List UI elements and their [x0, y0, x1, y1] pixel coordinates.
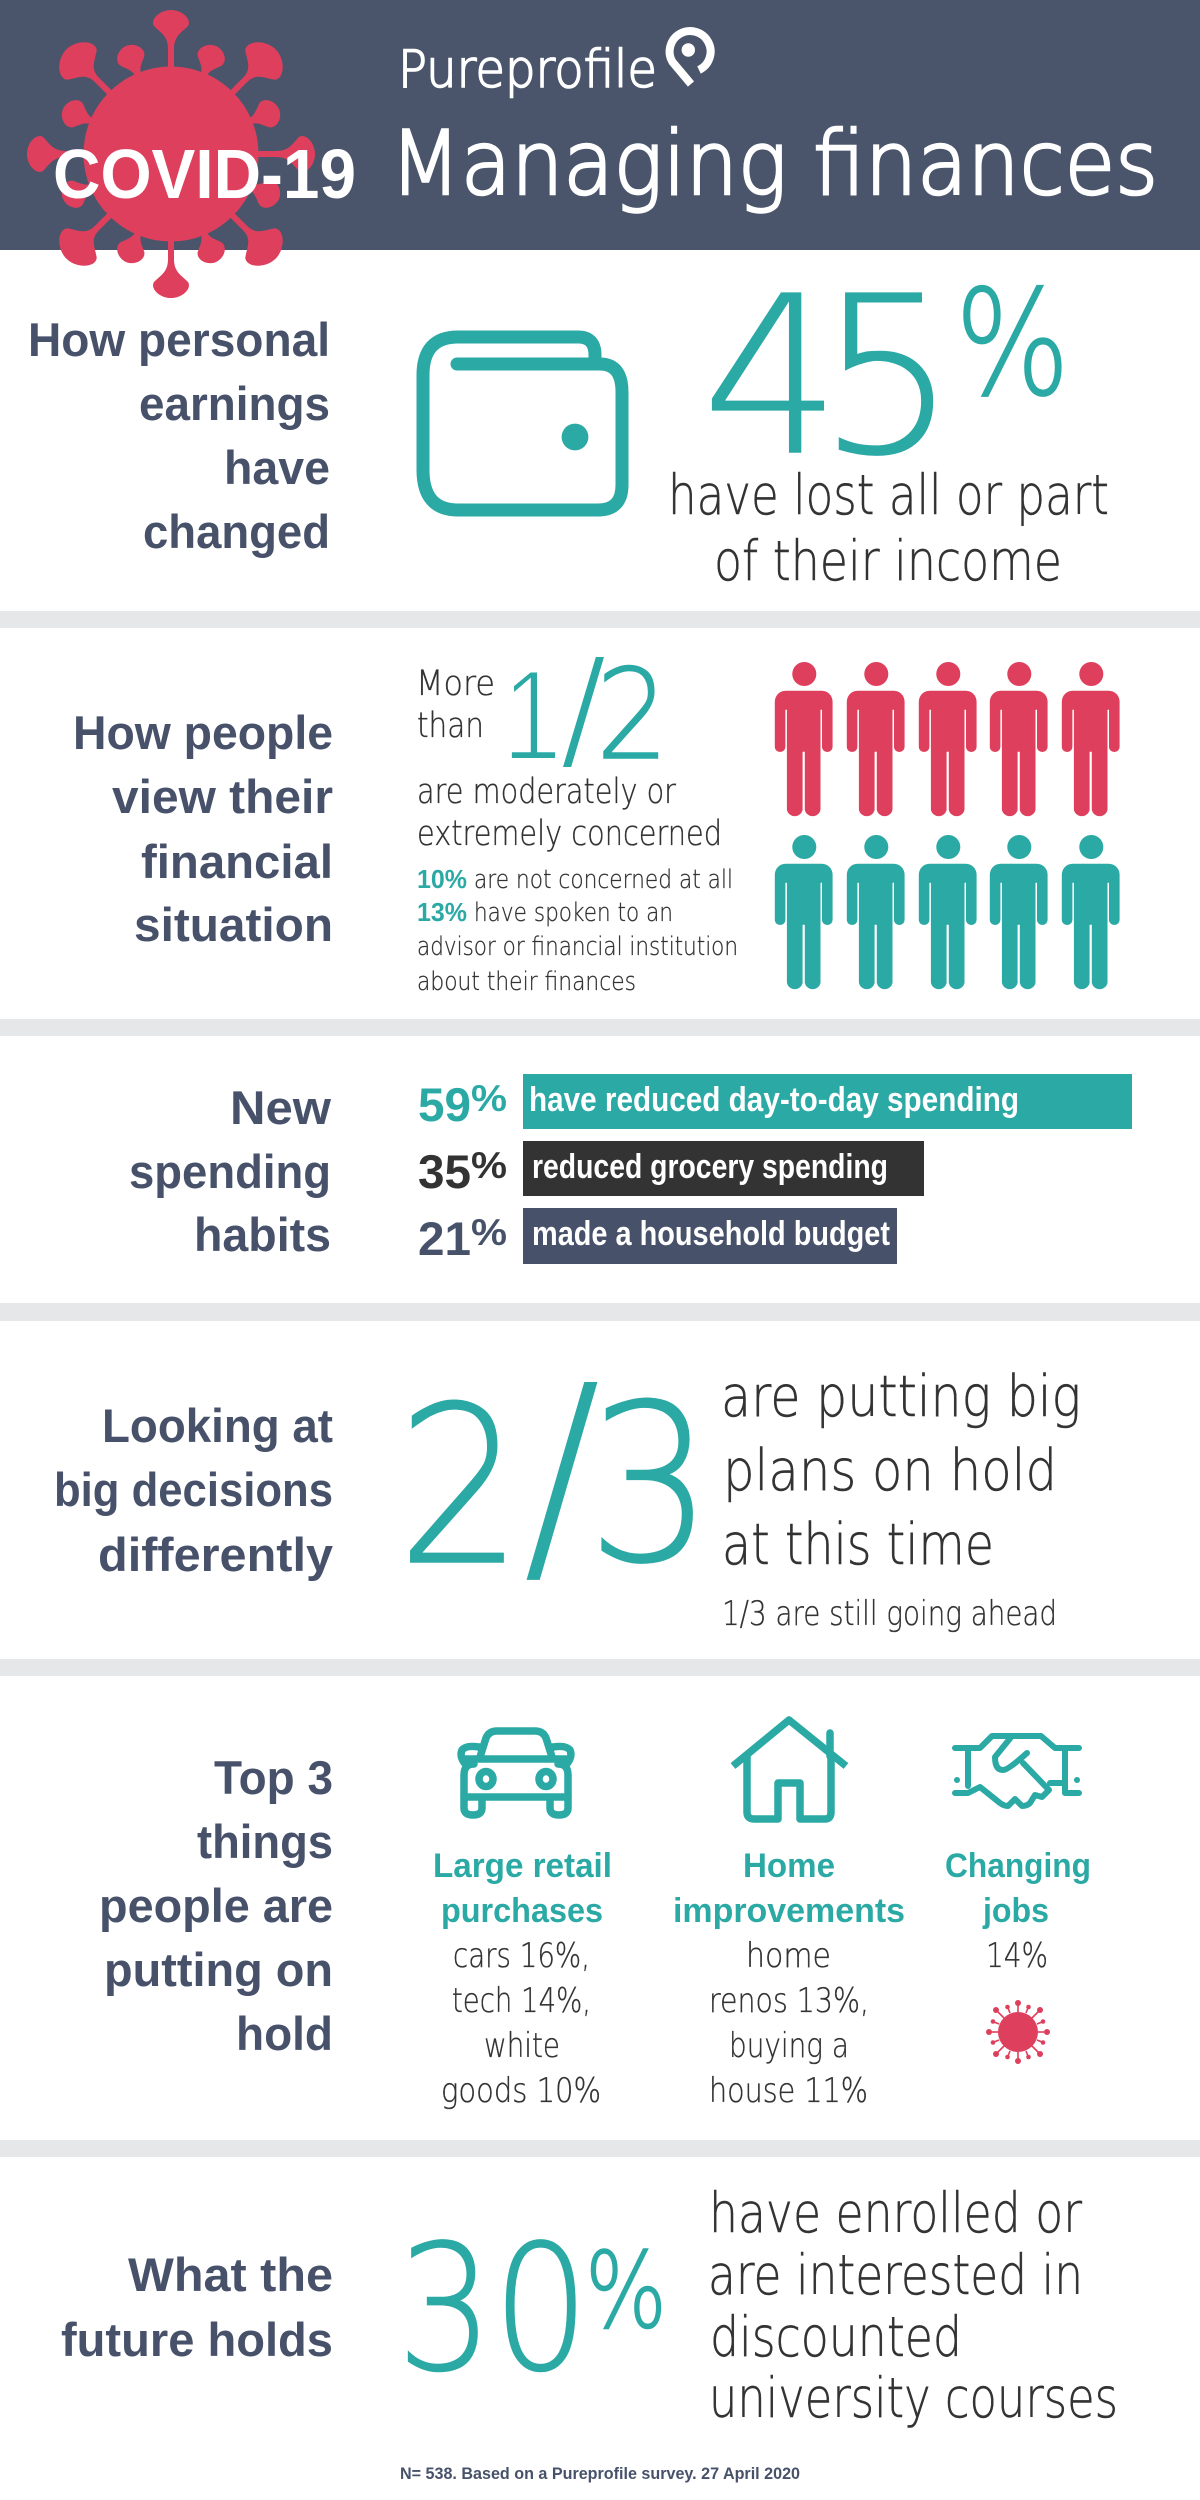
- bar: 59% reduced day-to-day spending: [418, 1074, 1132, 1131]
- heading: how people view their financial situation: situation: [134, 898, 333, 951]
- text: have enrolled or are interested in discounted university courses: have enrolled or: [709, 2181, 1082, 2245]
- column: home improvements: improvements: [673, 1892, 905, 1930]
- panel: top 3 things on hold: [99, 1720, 1091, 2111]
- column: large retail purchases: [433, 1847, 612, 2111]
- text: secondary stats: have spoken to an: [474, 898, 673, 928]
- stat: more than 1/2: [416, 632, 669, 788]
- title: Managing finances: Managing finances: [390, 112, 1158, 215]
- text: have lost all or part of their income: [668, 463, 1109, 593]
- text: 1/3 are still going ahead: 1/3 are still going ahead: [722, 1594, 1057, 1634]
- stat: 45%: [702, 251, 1070, 504]
- heading: how personal earnings have changed: [28, 313, 330, 558]
- column: large retail purchases: tech 14%,: [452, 1981, 591, 2021]
- text: have enrolled or are interested in discounted university courses: [708, 2181, 1118, 2430]
- text: secondary stats: 10%: [417, 864, 467, 894]
- column: changing jobs: Changing: [945, 1847, 1091, 1885]
- panel: big decisions: [54, 1336, 1081, 1634]
- stat: more than 1/2: 2: [596, 643, 669, 788]
- icon: location pin: [670, 31, 711, 84]
- bar: 21% made a household budget: [418, 1208, 897, 1265]
- text: have enrolled or are interested in discounted university courses: university courses: [709, 2366, 1118, 2430]
- heading: how people view their financial situation: financial: [141, 835, 333, 888]
- text: are moderately or extremely concerned: extremely concerned: [417, 814, 722, 854]
- stat: more than 1/2: 1: [502, 642, 562, 788]
- bar: 35% reduced grocery spending: [418, 1141, 924, 1198]
- icon: coronavirus: [27, 10, 315, 298]
- text: are moderately or extremely concerned: are moderately or: [417, 772, 676, 812]
- heading: top 3 things people are putting on hold: putting on: [104, 1943, 333, 1996]
- heading: how people view their financial situation: How people: [73, 706, 333, 759]
- text: are putting big plans on hold at this time: [721, 1364, 1081, 1578]
- bar: 59% reduced day-to-day spending: %: [471, 1078, 507, 1119]
- heading: what the future holds: What the: [128, 2248, 333, 2301]
- stat: 2/3: 3: [587, 1359, 713, 1612]
- bar: 35% reduced grocery spending: reduced grocery spending: [532, 1148, 888, 1186]
- heading: how personal earnings have changed: have: [224, 441, 330, 494]
- stat: more than 1/2: More: [416, 664, 495, 704]
- heading: how personal earnings have changed: changed: [143, 505, 330, 558]
- bar: 21% made a household budget: 21: [418, 1212, 471, 1265]
- icon: house: [733, 1720, 846, 1819]
- column: home improvements: [673, 1847, 905, 2111]
- heading: how personal earnings have changed: How personal: [28, 313, 330, 366]
- stat: 2/3: 2: [397, 1361, 523, 1614]
- text: have enrolled or are interested in discounted university courses: are interested in: [708, 2243, 1083, 2307]
- footnote: N= 538. Based on a Pureprofile survey. 27 April 2020: [400, 2464, 800, 2483]
- column: home improvements: house 11%: [709, 2071, 868, 2111]
- heading: looking at big decisions differently: [54, 1399, 333, 1581]
- stat: 30%: %: [585, 2230, 667, 2352]
- heading: top 3 things people are putting on hold: hold: [236, 2007, 333, 2060]
- heading: how people view their financial situation: view their: [112, 770, 333, 823]
- text: are putting big plans on hold at this time: at this time: [722, 1512, 994, 1578]
- text: have enrolled or are interested in discounted university courses: discounted: [710, 2305, 962, 2369]
- text: secondary stats: 13%: [417, 897, 467, 927]
- panel: financial situation: [73, 632, 1120, 997]
- panel: spending habits: [129, 1074, 1132, 1265]
- stat: 30%: 30: [397, 2208, 589, 2411]
- heading: COVID-19: COVID-19: [53, 135, 356, 213]
- text: have lost all or part of their income: have lost all or part: [668, 463, 1109, 527]
- stat: more than 1/2: /: [562, 632, 605, 786]
- heading: top 3 things people are putting on hold: things: [197, 1815, 333, 1868]
- column: large retail purchases: cars 16%,: [453, 1936, 590, 1976]
- text: secondary stats: about their finances: [417, 967, 636, 997]
- heading: what the future holds: [61, 2248, 333, 2366]
- panel: personal earnings: [28, 251, 1109, 593]
- text: are putting big plans on hold at this time: are putting big: [721, 1364, 1081, 1430]
- header band: [0, 0, 1200, 250]
- icon: small coronavirus: [986, 2000, 1050, 2064]
- column: home improvements: Home: [743, 1847, 835, 1885]
- text: are moderately or extremely concerned: [417, 772, 722, 854]
- heading: how people view their financial situation: [73, 706, 333, 951]
- stat: more than 1/2: than: [417, 706, 484, 746]
- heading: how personal earnings have changed: earnings: [139, 377, 330, 430]
- bar: 21% made a household budget: made a household budget: [532, 1215, 890, 1253]
- column: changing jobs: 14%: [986, 1936, 1048, 1976]
- column: home improvements: home: [746, 1936, 831, 1976]
- stat: 45%: %: [955, 259, 1070, 429]
- heading: looking at big decisions differently: Looking at: [102, 1399, 333, 1452]
- text: are putting big plans on hold at this time: plans on hold: [723, 1438, 1057, 1504]
- text: have lost all or part of their income: of their income: [714, 529, 1062, 593]
- panel: the future: [61, 2181, 1118, 2430]
- heading: what the future holds: future holds: [61, 2313, 333, 2366]
- column: changing jobs: [945, 1847, 1091, 1976]
- icon: five teal people: [775, 835, 1120, 989]
- column: changing jobs: jobs: [982, 1892, 1049, 1930]
- heading: new spending habits: habits: [194, 1208, 331, 1261]
- heading: looking at big decisions differently: big decisions: [54, 1463, 333, 1516]
- logo: Pureprofile wordmark: Pureprofile: [398, 40, 657, 100]
- heading: new spending habits: New: [230, 1081, 331, 1134]
- column: large retail purchases: goods 10%: [441, 2071, 601, 2111]
- text: secondary stats: advisor or financial institution: [417, 932, 738, 962]
- icon: five red people: [775, 662, 1120, 816]
- bar: 35% reduced grocery spending: %: [471, 1145, 507, 1186]
- column: home improvements: buying a: [729, 2026, 849, 2066]
- heading: looking at big decisions differently: differently: [98, 1528, 333, 1581]
- text: secondary stats: [417, 864, 738, 997]
- heading: new spending habits: spending: [129, 1145, 331, 1198]
- bar: 59% reduced day-to-day spending: 59: [418, 1078, 471, 1131]
- column: home improvements: renos 13%,: [709, 1981, 869, 2021]
- stat: 45%: 45: [702, 251, 957, 504]
- text: secondary stats: are not concerned at all: [474, 865, 733, 895]
- stat: 2/3: [397, 1336, 713, 1614]
- heading: new spending habits: [129, 1081, 331, 1261]
- heading: top 3 things people are putting on hold: Top 3: [214, 1751, 333, 1804]
- heading: top 3 things people are putting on hold: people are: [99, 1879, 333, 1932]
- heading: top 3 things people are putting on hold: [99, 1751, 333, 2060]
- column: large retail purchases: white: [484, 2026, 560, 2066]
- icon: handshake: [954, 1736, 1080, 1806]
- icon: wallet: [423, 337, 622, 510]
- stat: 2/3: /: [524, 1336, 600, 1614]
- icon: car: [461, 1731, 571, 1815]
- bar: 59% reduced day-to-day spending: have reduced day-to-day spending: [529, 1081, 1019, 1119]
- bar: 35% reduced grocery spending: 35: [418, 1145, 471, 1198]
- bar: 21% made a household budget: %: [471, 1212, 507, 1253]
- column: large retail purchases: purchases: [441, 1892, 603, 1930]
- column: large retail purchases: Large retail: [433, 1847, 612, 1885]
